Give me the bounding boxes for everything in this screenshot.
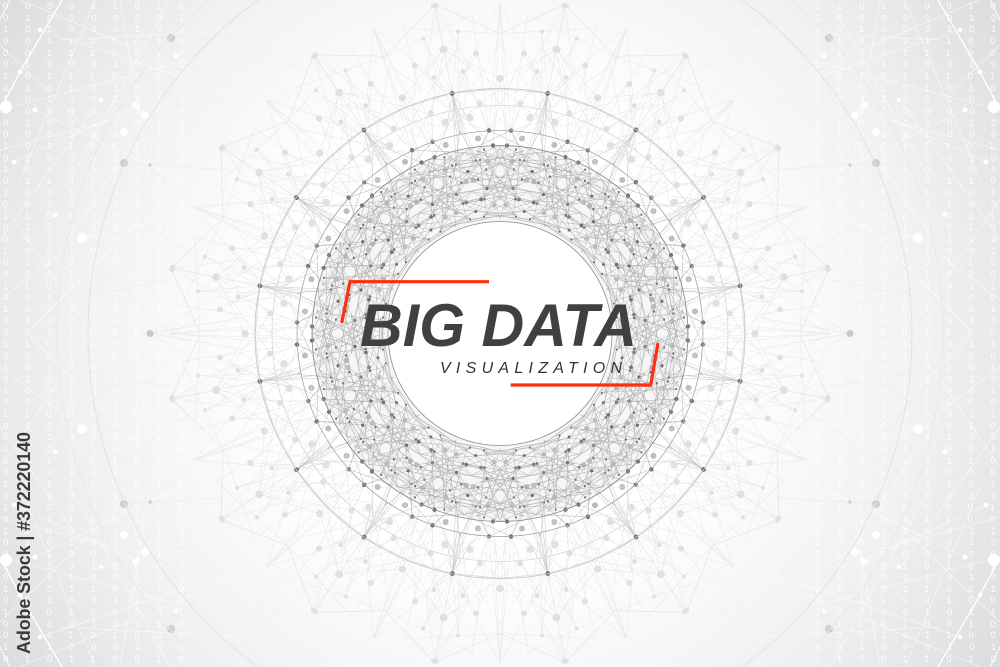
subtitle: VISUALIZATION: VISUALIZATION	[440, 360, 622, 377]
binary column block: left: 000011010 010000001 101000100 001100010 001110010 010001001 101110100 010101011 101001010 000000000 010010010 000100010 101110110 010001001 101010001 011000100 100110101 001001000 110100110 010011001 001010100 100101001 011000110 000110010 110001010 001011001 100100110 010010100 001101011 110010001 000110100 101000110 010101001 100100010 001011100 110001001 010100110 001010001 100110100 011001010 000101101 101100010 010010001 100001110 001110100 110010010 010101001 001000110 101011000 010100101 100110010 001001101 110100001 010010110 001101000 101000101 010110010	[3, 1, 201, 665]
red bracket: bottom right	[511, 343, 658, 385]
vertical stock id text: Adobe Stock | #372220140	[14, 432, 34, 654]
title: BIG DATA: BIG DATA	[360, 292, 637, 359]
red bracket: top left	[342, 282, 489, 323]
central white circle	[388, 222, 612, 446]
soft tonal band under the mesh	[350, 184, 650, 484]
horizontal tip nodes	[146, 330, 854, 337]
concentric node rings	[255, 88, 745, 578]
